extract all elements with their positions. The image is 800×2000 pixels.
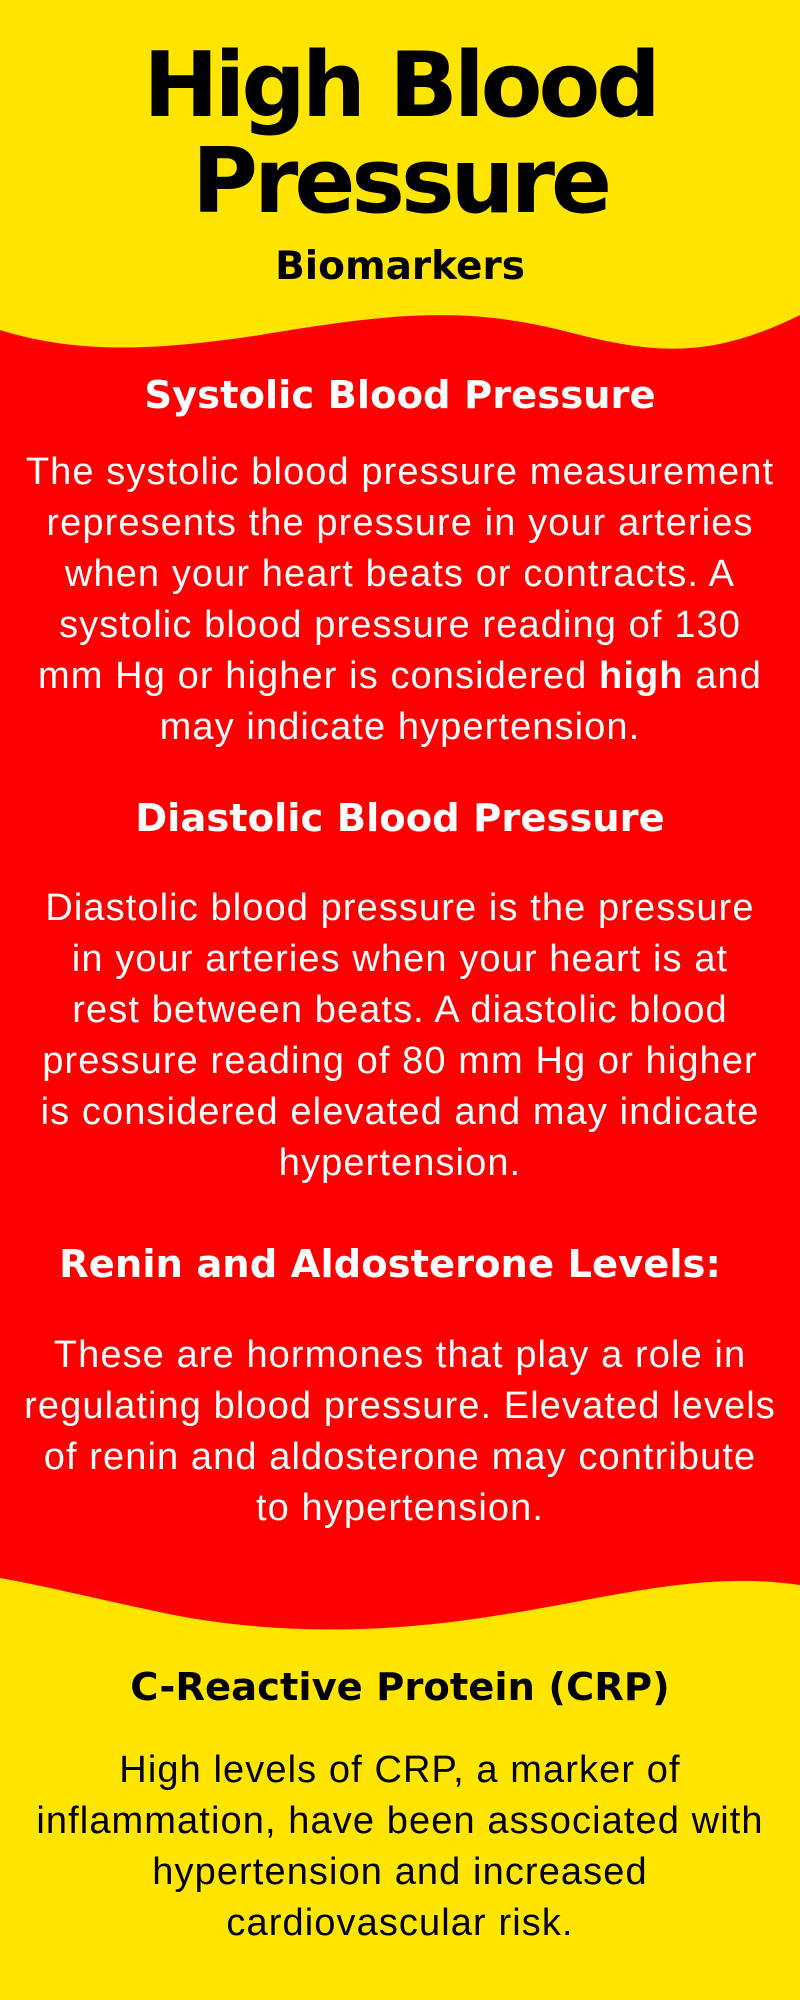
- text: renin: These are hormones that play a role in: [54, 1334, 746, 1376]
- text: diastolic: is considered elevated and may indicate: [41, 1091, 759, 1133]
- text: diastolic: [41, 887, 759, 1184]
- title: Pressure: [192, 129, 608, 234]
- text: CRP: [36, 1749, 764, 1944]
- text: diastolic: pressure reading of 80 mm Hg or higher: [42, 1040, 758, 1082]
- text: CRP: High levels of CRP, a marker of: [119, 1749, 681, 1791]
- text: systolic: when your heart beats or contracts. A: [65, 553, 735, 595]
- text: diastolic: hypertension.: [279, 1142, 521, 1184]
- text: systolic: mm Hg or higher is considered high and: [38, 655, 762, 697]
- heading: CRP: C-Reactive Protein (CRP): [130, 1665, 670, 1710]
- heading: systolic: Systolic Blood Pressure: [144, 373, 656, 418]
- heading: renin: Renin and Aldosterone Levels:: [59, 1242, 721, 1287]
- text: systolic: represents the pressure in your arteries: [46, 502, 754, 544]
- text: renin: [24, 1334, 776, 1529]
- text: diastolic: rest between beats. A diastolic blood: [72, 989, 728, 1031]
- heading: diastolic: Diastolic Blood Pressure: [135, 796, 665, 841]
- title: [143, 33, 657, 234]
- text: CRP: inflammation, have been associated with: [36, 1800, 764, 1842]
- text: systolic: systolic blood pressure reading of 130: [59, 604, 741, 646]
- text: renin: regulating blood pressure. Elevated levels: [24, 1385, 776, 1427]
- text: renin: of renin and aldosterone may contribute: [44, 1436, 756, 1478]
- text: systolic: may indicate hypertension.: [160, 706, 640, 748]
- text: diastolic: in your arteries when your heart is at: [72, 938, 728, 980]
- text: CRP: cardiovascular risk.: [226, 1902, 574, 1944]
- text: diastolic: Diastolic blood pressure is the pressure: [45, 887, 755, 929]
- title: High Blood: [143, 33, 657, 138]
- text: systolic: The systolic blood pressure measurement: [26, 451, 774, 493]
- text: CRP: hypertension and increased: [152, 1851, 648, 1893]
- text: systolic: [26, 451, 774, 748]
- subtitle: Biomarkers: [275, 244, 525, 289]
- text: renin: to hypertension.: [256, 1487, 544, 1529]
